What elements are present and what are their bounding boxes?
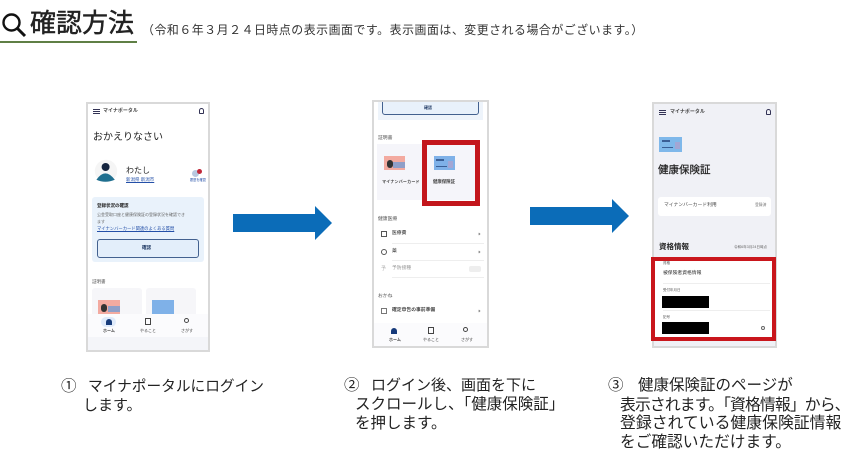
step 1 text: [61, 378, 264, 414]
confirm button: [97, 239, 199, 258]
step 2 text: スクロールし、「健康保険証」: [355, 396, 564, 413]
page title: 健康保険証: [658, 164, 710, 176]
icon: my number card: [384, 156, 405, 170]
arrow: step 2 to 3: [530, 199, 629, 233]
greeting: おかえりなさい: [93, 132, 163, 143]
bottom navigation: さがす: [461, 337, 473, 342]
list rows: [381, 230, 484, 278]
list rows: 医療費: [392, 231, 406, 236]
avatar: [95, 160, 117, 182]
icon: health insurance card: [434, 156, 455, 170]
registration status card: 登録状況の確認: [97, 203, 128, 208]
highlighted info box: 受付年月日: [663, 288, 680, 292]
medical section: 健康医療: [378, 217, 397, 222]
panel: phone screen 1: [86, 102, 210, 352]
my number card usage row: マイナンバーカード利用: [664, 203, 717, 208]
card tiles: 健康保険証: [433, 179, 455, 184]
my number card usage row: 登録済: [755, 203, 766, 207]
registration status card: [92, 197, 204, 262]
panel: phone screen 2: [372, 100, 489, 348]
icon: health insurance card: [659, 137, 682, 152]
step 1 text: ①: [61, 378, 77, 395]
my number card usage row: [658, 197, 771, 216]
bottom navigation: さがす: [181, 328, 193, 333]
redacted value: [662, 296, 709, 308]
confirm button: 確認: [142, 245, 151, 250]
top button remnant: 確認: [424, 105, 432, 110]
app header: [659, 108, 771, 115]
user block: わたし: [126, 166, 150, 175]
bottom navigation: やること: [140, 328, 156, 333]
bottom navigation: ホーム: [103, 328, 115, 333]
step 2 text: ②: [344, 377, 360, 394]
registration status card: 公金受取口座と健康保険証の登録状況を確認でき: [97, 212, 185, 217]
list rows: 薬: [392, 249, 397, 254]
step 1 text: します。: [83, 397, 142, 414]
title text: 確認方法: [30, 8, 134, 38]
list rows: 予防接種: [392, 266, 411, 271]
bottom navigation: やること: [423, 337, 439, 342]
section label: 証明書: [92, 279, 106, 284]
bottom navigation: [374, 323, 487, 348]
tax section: おかね: [378, 294, 392, 299]
arrow: step 1 to 2: [233, 206, 332, 240]
registration status card: マイナンバーカード関連のよくある質問: [97, 226, 174, 231]
highlight box: [422, 140, 480, 206]
step 3 text: をご確認いただけます。: [620, 434, 791, 451]
user block: [95, 160, 206, 183]
section label: 証明書: [378, 136, 392, 141]
card tiles: [92, 288, 142, 328]
user block: 新潟県 新潟市: [126, 177, 154, 182]
highlighted info box: [651, 257, 776, 341]
step 3 text: 登録されている健康保険証情報: [620, 415, 841, 432]
user block: 履歴を確認: [190, 178, 206, 182]
list rows: 予: [381, 266, 386, 272]
step 1 text: マイナポータルにログイン: [88, 379, 264, 395]
step 2 text: を押します。: [355, 415, 446, 432]
panel: phone screen 2: 確定申告の事前準備: [392, 308, 435, 313]
icon: magnifier: [2, 13, 26, 37]
highlighted info box: 記号: [663, 315, 670, 319]
title underline: [0, 41, 137, 43]
redacted value: [662, 322, 709, 334]
step 3 text: 健康保険証のページが: [638, 377, 793, 394]
card tiles: [377, 144, 480, 200]
icon: health insurance card: [152, 300, 174, 314]
app header: マイナポータル: [103, 108, 138, 114]
highlighted info box: 被保険者資格情報: [663, 271, 701, 276]
note text: （令和６年３月２４日時点の表示画面です。表示画面は、変更される場合がございます。）: [142, 23, 644, 37]
step 3 text: ③: [608, 377, 624, 394]
heading: 確認方法: [0, 8, 644, 43]
panel: phone screen 3: 令和6年3月24日時点: [734, 245, 767, 249]
bottom navigation: [88, 314, 208, 337]
notification: [192, 170, 199, 177]
qualification heading: 資格情報: [659, 242, 689, 251]
icon: my number card: [98, 300, 120, 314]
bottom navigation: ホーム: [389, 337, 401, 342]
step 3 text: [608, 376, 850, 451]
app header: [93, 108, 204, 114]
card tiles: マイナンバーカード: [382, 179, 420, 184]
panel: phone screen 3: [652, 102, 777, 348]
step 2 text: ログイン後、画面を下に: [371, 377, 536, 394]
highlighted info box: 資格: [663, 261, 670, 265]
app header: マイナポータル: [670, 109, 705, 115]
top button remnant: [378, 102, 483, 120]
step 2 text: [344, 377, 564, 432]
step 3 text: 表示されます。「資格情報」から、: [620, 397, 850, 414]
registration status card: ます: [97, 219, 105, 224]
